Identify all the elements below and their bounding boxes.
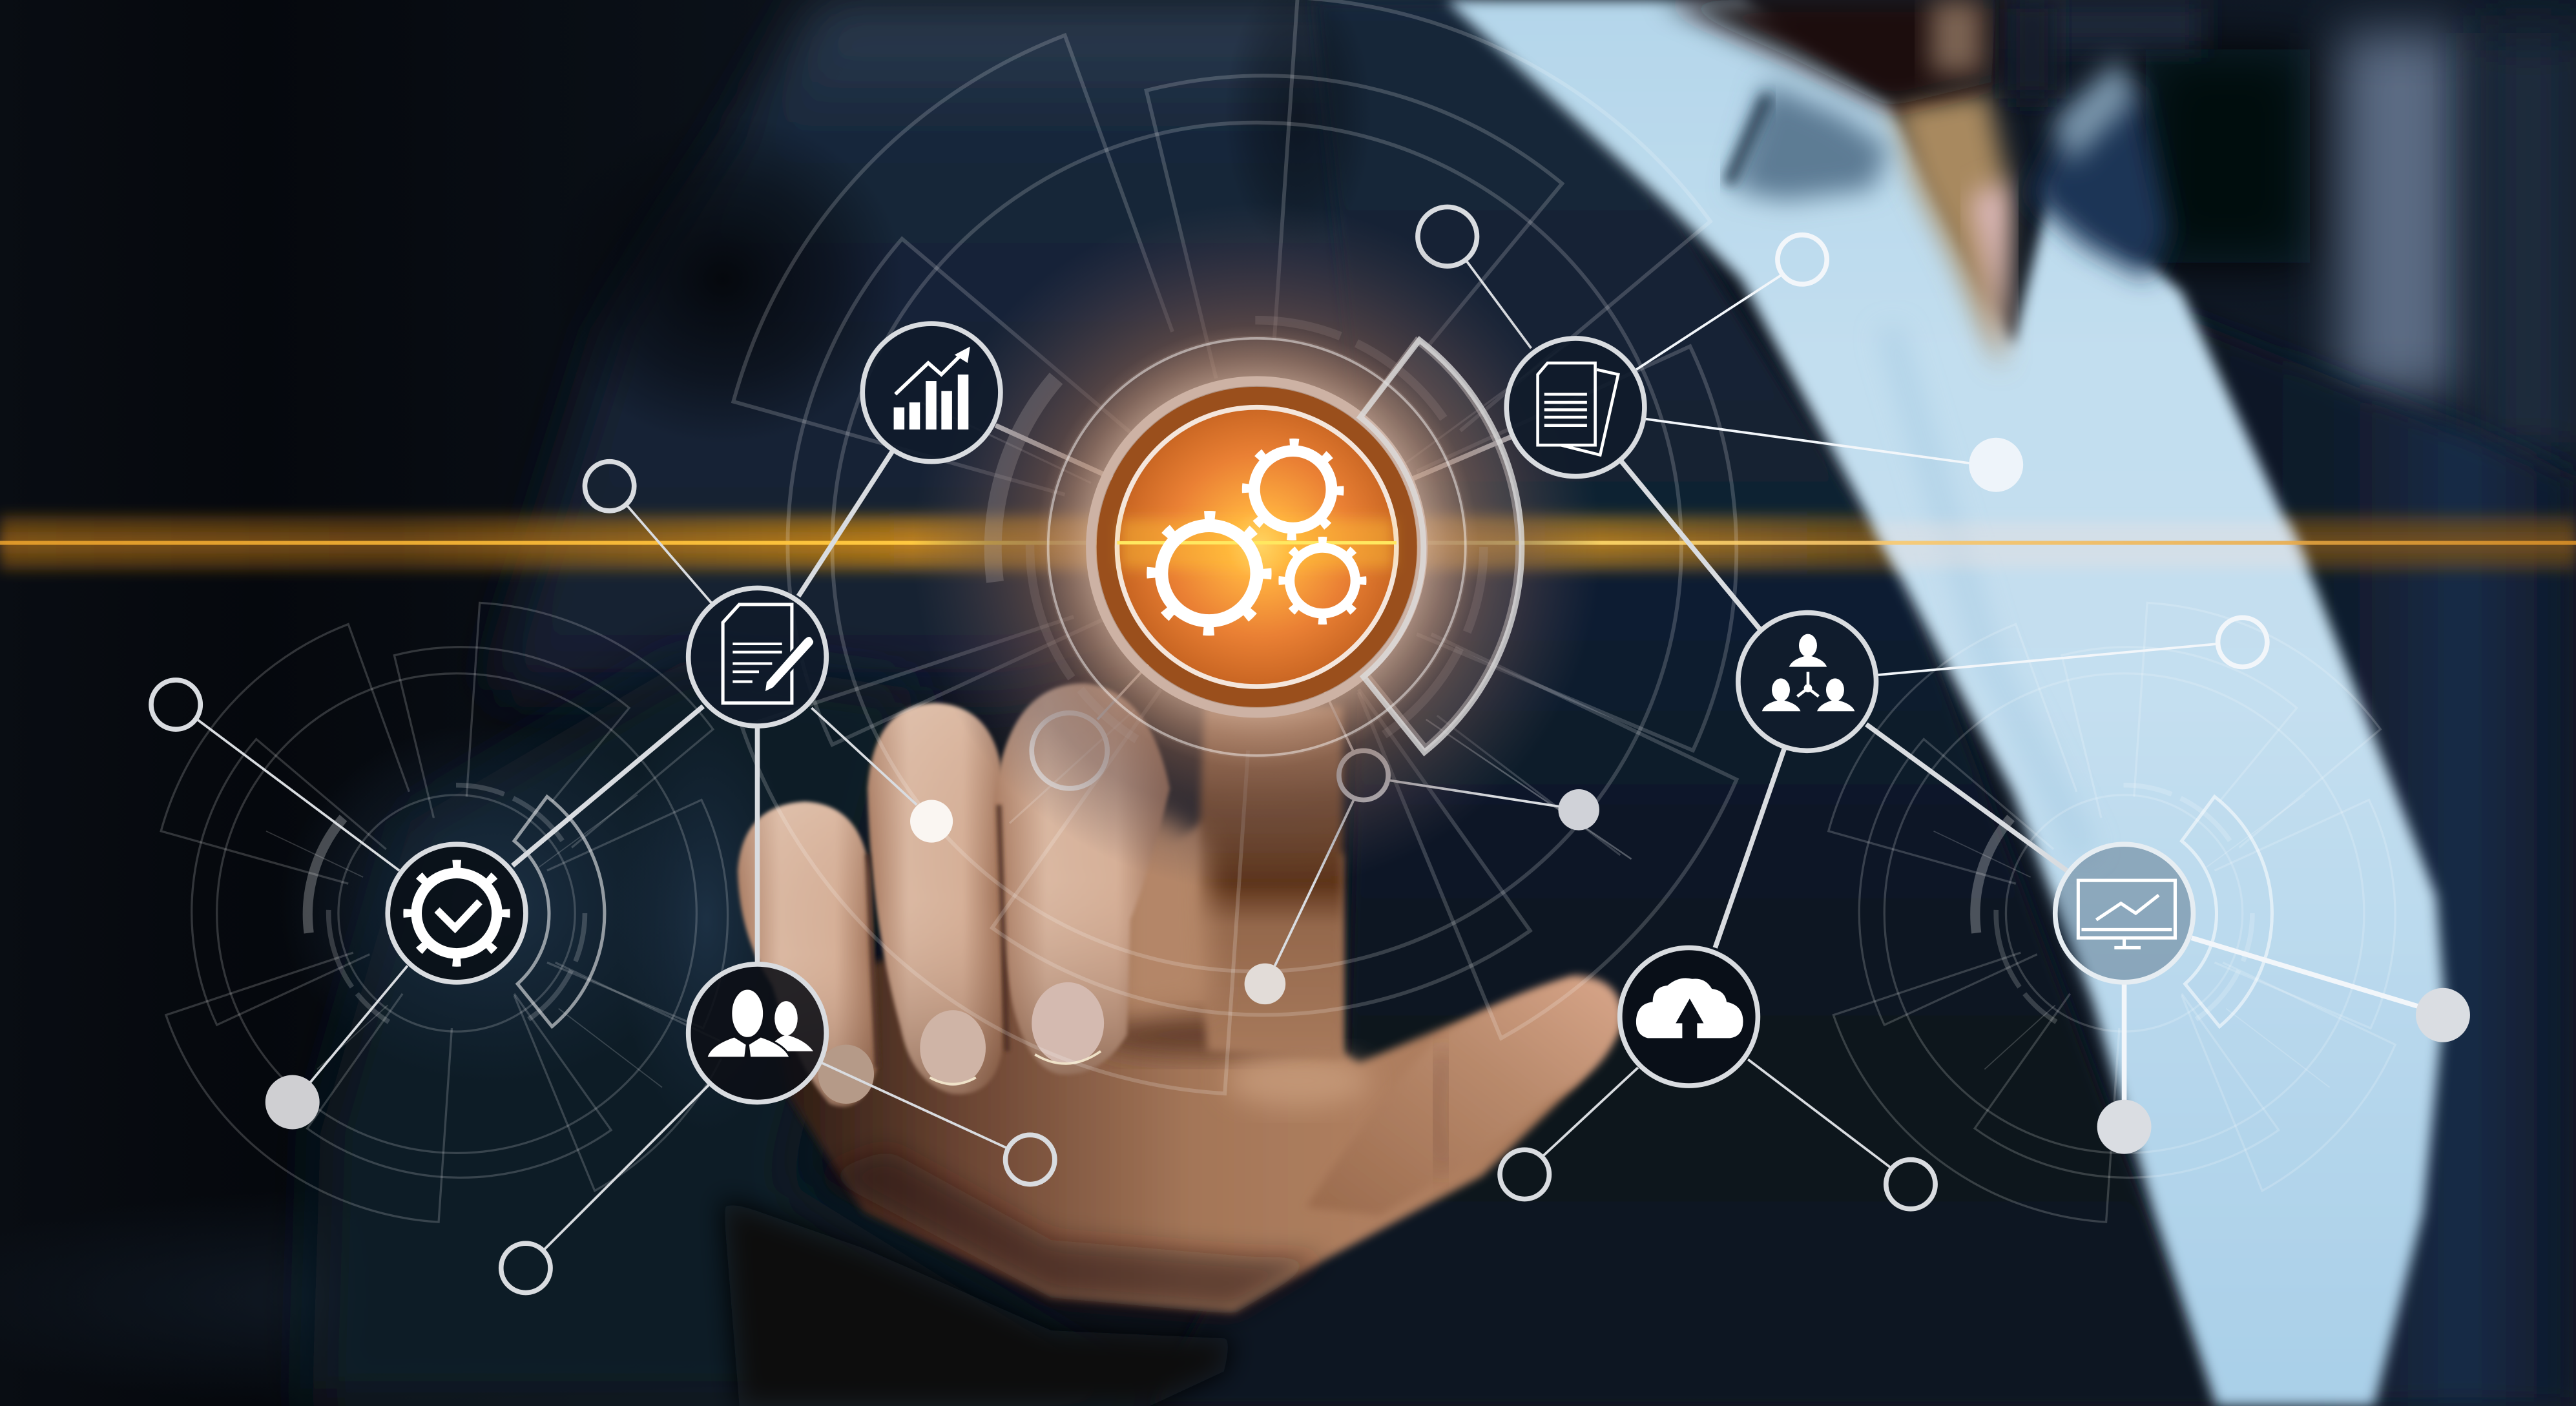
middle nail tip (1035, 1051, 1101, 1064)
hud rings: centre (733, 0, 1736, 1093)
jacket front (1150, 0, 2221, 1406)
icon: users (707, 989, 813, 1058)
hand (723, 683, 1623, 1406)
node: monitor (2055, 844, 2193, 982)
ring nail tip (930, 1077, 976, 1084)
central hub (1035, 326, 1522, 769)
shadow patch top (1224, 0, 1372, 254)
connector lines (197, 260, 2420, 1250)
neck pink edge (1971, 181, 2008, 353)
chin lit edge (1930, 0, 1983, 74)
icon: documents (1538, 363, 1618, 455)
small open node circles (151, 207, 2267, 1293)
dark band beside neck (2008, 0, 2057, 99)
shadow patch (542, 115, 904, 444)
index finger (1196, 707, 1342, 1059)
pinky finger (738, 801, 877, 1106)
icon: monitor (2078, 880, 2175, 947)
hub outer rings (1048, 338, 1466, 756)
hub line (1117, 541, 1397, 544)
node: cloud upload (1620, 947, 1758, 1086)
orange light streak band (0, 516, 2576, 570)
right collar (2029, 82, 2168, 279)
shirt (1446, 0, 2445, 1406)
palm crease highlight (1225, 1055, 1370, 1107)
jacket right (2172, 312, 2576, 1406)
node: bar chart (862, 324, 1001, 462)
thumb knuckle shadow (1436, 1051, 1446, 1170)
pinky nail (818, 1044, 874, 1104)
ring nail (920, 1010, 986, 1086)
gear small (1282, 541, 1363, 621)
gear top (1246, 442, 1340, 536)
streak across hub (1121, 519, 1393, 568)
thumb (1306, 976, 1623, 1215)
hub right arc (1360, 340, 1522, 752)
icon: bar chart (894, 347, 970, 429)
forearm sleeve (312, 657, 1150, 1406)
gears (1152, 442, 1363, 631)
middle nail (1032, 982, 1104, 1064)
streak on shirt (1873, 522, 2310, 568)
node: users (689, 964, 826, 1102)
shirt and neck (1446, 0, 2445, 1406)
hud rings: right (1829, 603, 2395, 1222)
gear large (1152, 516, 1267, 631)
icon: gear with check (408, 864, 506, 962)
icon: document and pen (723, 605, 815, 703)
middle finger (994, 683, 1170, 1075)
cuff shadow (723, 1199, 1232, 1406)
hud rings: left (161, 603, 728, 1222)
chin shadow (1663, 0, 1996, 107)
hub disc (1117, 408, 1397, 687)
ring finger (867, 703, 1004, 1094)
web between fingers (1117, 789, 1212, 1018)
node: documents (1506, 338, 1645, 477)
node: document and pen (689, 588, 826, 726)
left collar (1733, 82, 1889, 200)
filled node dots (265, 438, 2470, 1154)
left collar fold (1729, 96, 1768, 184)
streak centre line (0, 541, 2576, 545)
shirt shadow crease (1889, 329, 2086, 854)
sleeve highlight near hand (616, 707, 797, 1133)
upper sleeve (493, 0, 1479, 690)
icon: team (1762, 634, 1854, 711)
palm (772, 822, 1618, 1312)
palm under-shadow (822, 1150, 1327, 1314)
central glow (912, 202, 1602, 892)
neck (1889, 90, 2008, 369)
hub halo (1035, 326, 1479, 769)
node: team (1738, 613, 1876, 750)
finger gaps (867, 805, 1007, 1068)
sleeve highlight (279, 723, 707, 1084)
palm shadow below fingers (1092, 1013, 1322, 1056)
right collar top (2053, 57, 2135, 164)
icon: cloud upload (1636, 978, 1743, 1040)
node: gear with check (388, 844, 526, 982)
